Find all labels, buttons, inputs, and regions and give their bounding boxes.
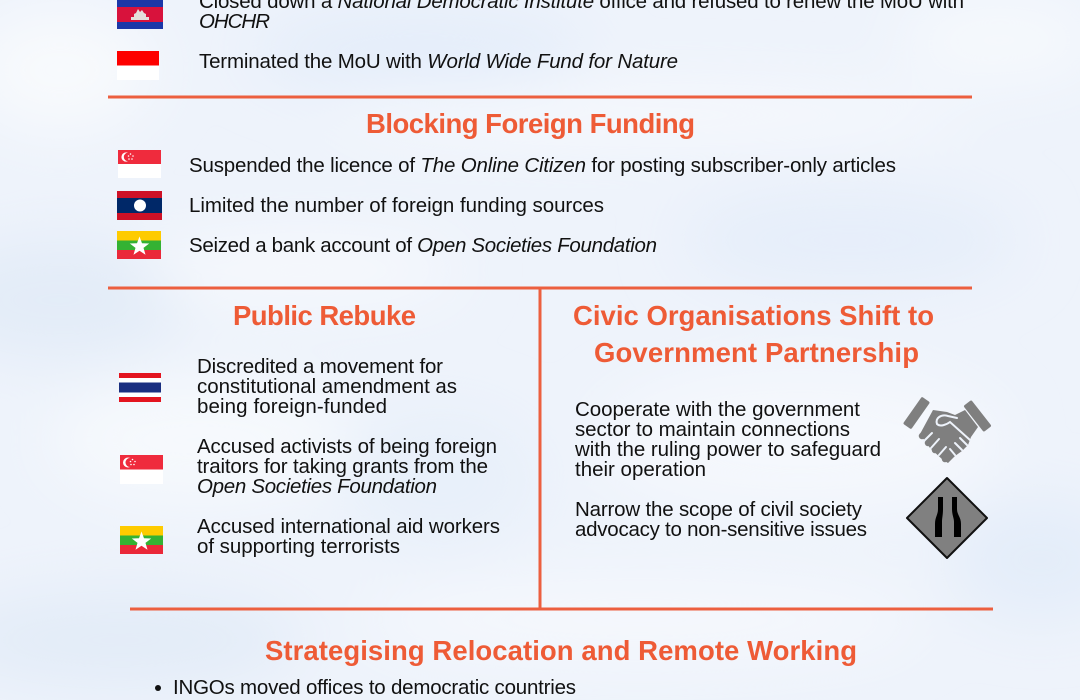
text: narrow scope: Narrow the scope of civil society (575, 498, 863, 521)
icon: Singapore flag (118, 150, 161, 178)
text: Myanmar accusation: of supporting terrorists (197, 535, 400, 558)
text: Singapore action: Suspended the licence of The Online Citizen for posting subscriber-only articles (189, 154, 896, 177)
icon: road narrows sign (907, 478, 987, 558)
icon: Thailand flag (119, 373, 161, 402)
text: Singapore accusation: Accused activists of being foreign (197, 435, 497, 458)
text: Singapore accusation (197, 435, 497, 498)
panel: closing offices (117, 0, 964, 80)
text: Myanmar action: Seized a bank account of Open Societies Foundation (189, 234, 657, 257)
heading: Public Rebuke: Public Rebuke (233, 300, 416, 331)
heading: Strategising Relocation and Remote Working: Strategising Relocation and Remote Working (265, 635, 857, 666)
panel: blocking foreign funding (117, 108, 896, 259)
text: cooperate with government: their operation (575, 458, 706, 481)
text: Singapore accusation: Open Societies Foundation (197, 475, 437, 498)
text: narrow scope: advocacy to non-sensitive issues (575, 518, 867, 541)
text: Singapore accusation: traitors for taking grants from the (197, 455, 488, 478)
icon: handshake (903, 397, 992, 463)
icon: Singapore flag (120, 455, 163, 484)
panel: civic organisations shift (573, 300, 992, 558)
text: Myanmar accusation (197, 515, 500, 558)
heading: Civic Organisations Shift to Government Partnership: Civic Organisations Shift to (573, 300, 934, 331)
heading: Civic Organisations Shift to Government Partnership (573, 300, 934, 368)
text: Myanmar accusation: Accused international aid workers (197, 515, 500, 538)
text: Thailand action (197, 355, 457, 418)
bullet: INGOs moved offices: INGOs moved offices to democratic countries (173, 676, 576, 699)
text: OHCHR: OHCHR (199, 10, 270, 33)
panel: relocation and remote working (155, 635, 857, 699)
icon: Myanmar flag (117, 231, 161, 259)
text: cooperate with government: Cooperate with the government (575, 398, 860, 421)
text: Thailand action: constitutional amendment as (197, 375, 457, 398)
panel: public rebuke (119, 300, 500, 558)
text: cooperate with government (574, 398, 881, 481)
icon: Indonesia flag (117, 51, 159, 80)
heading: Blocking Foreign Funding: Blocking Foreign Funding (366, 108, 695, 139)
text: cooperate with government: with the ruling power to safeguard (574, 438, 881, 461)
heading: Civic Organisations Shift to Government Partnership: Government Partnership (594, 337, 919, 368)
icon: Myanmar flag (120, 526, 163, 554)
text: Indonesia action: Terminated the MoU with World Wide Fund for Nature (199, 50, 678, 73)
text: narrow scope (575, 498, 867, 541)
text: Thailand action: being foreign-funded (197, 395, 387, 418)
text: Laos action: Limited the number of foreign funding sources (189, 194, 604, 217)
icon: Cambodia flag (117, 0, 163, 29)
text: cooperate with government: sector to maintain connections (575, 418, 850, 441)
text: Thailand action: Discredited a movement for (197, 355, 443, 378)
icon: Laos flag (117, 191, 162, 220)
